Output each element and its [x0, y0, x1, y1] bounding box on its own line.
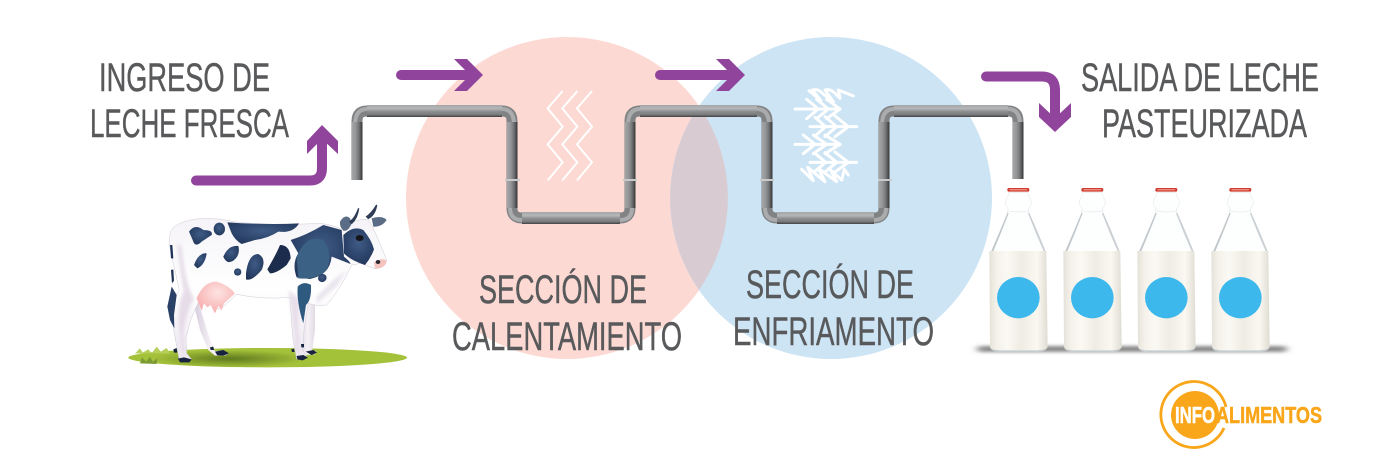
heading: cooling section: [733, 262, 934, 354]
pipe system: [352, 105, 1024, 224]
illustration: milk bottle 4: [1211, 188, 1270, 352]
icon: heat zigzag lines: [548, 91, 592, 180]
heading: heating section: SECCIÓN DE: [479, 267, 647, 312]
arrow: into cooling section: [660, 59, 745, 91]
logo: InfoAlimentos: [1161, 382, 1322, 448]
arrow: milk entering: [196, 125, 338, 180]
heading: cooling section: SECCIÓN DE: [746, 262, 914, 307]
bottles shadow: [978, 346, 1286, 352]
panel: heating section circle: [406, 37, 728, 359]
logo: InfoAlimentos: INFO: [1175, 402, 1215, 428]
illustration: cow on grass: [128, 205, 407, 367]
icon: cold feather pattern: [795, 90, 857, 182]
logo: InfoAlimentos: ALIMENTOS: [1216, 402, 1322, 428]
heading: fresh milk intake: INGRESO DE: [99, 56, 270, 100]
arrow: into heating section: [401, 59, 483, 91]
illustration: milk bottle 1: [989, 188, 1048, 352]
overlap of the two circles: [670, 106, 728, 290]
heading: cooling section: ENFRIAMENTO: [733, 310, 934, 354]
illustration: milk bottle 3: [1137, 188, 1196, 352]
heading: pasteurized milk output: [1081, 56, 1319, 146]
arrow: milk leaving: [986, 76, 1071, 132]
illustration: milk bottle 2: [1063, 188, 1122, 352]
heading: pasteurized milk output: PASTEURIZADA: [1102, 102, 1307, 146]
heading: heating section: [452, 267, 682, 359]
heading: heating section: CALENTAMIENTO: [452, 315, 682, 359]
heading: fresh milk intake: [90, 56, 289, 146]
panel: cooling section circle: [670, 37, 992, 359]
heading: fresh milk intake: LECHE FRESCA: [90, 102, 289, 146]
